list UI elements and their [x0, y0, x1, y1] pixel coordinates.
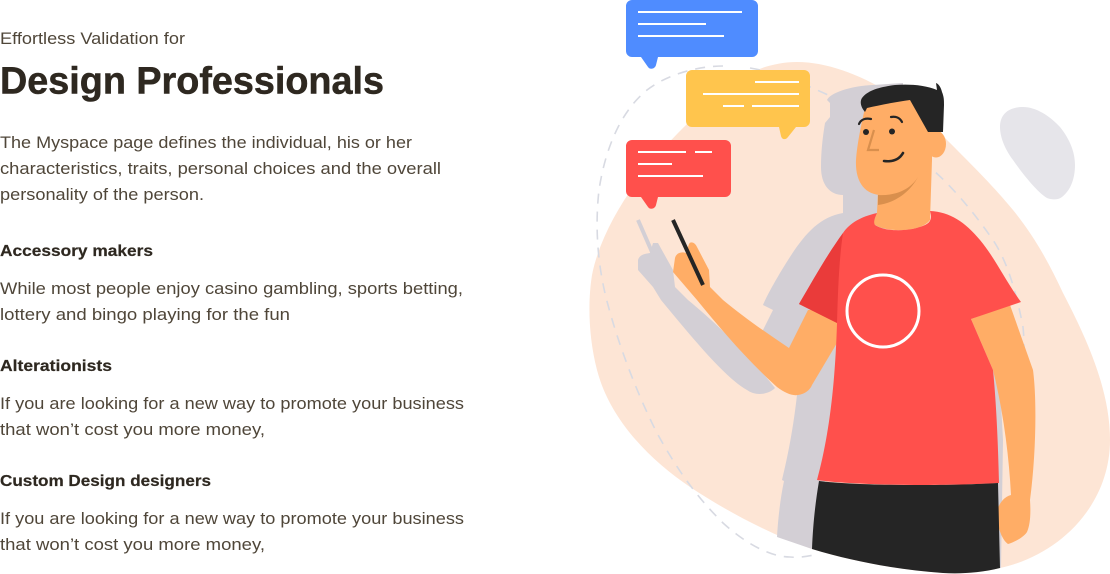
title: Design Professionals — [0, 60, 384, 102]
heading: alterationists: Alterationists — [0, 358, 112, 375]
paragraph: custom design designers: that won’t cost you more money, — [0, 536, 265, 554]
paragraph: accessory makers: While most people enjoy casino gambling, sports betting, — [0, 280, 463, 298]
right arm and fist — [971, 305, 1035, 544]
paragraph: custom design designers: If you are looking for a new way to promote your business — [0, 510, 464, 528]
heading: custom design designers: Custom Design designers — [0, 473, 211, 490]
shadow stylus — [638, 220, 652, 252]
intro paragraph: personality of the person. — [0, 186, 204, 204]
illustration — [589, 0, 1110, 573]
face — [856, 95, 932, 195]
yellow chat bubble — [686, 70, 810, 139]
neck — [873, 160, 932, 230]
hair — [861, 83, 944, 132]
paragraph: custom design designers — [0, 510, 464, 554]
paragraph: alterationists: If you are looking for a new way to promote your business — [0, 395, 464, 413]
shirt sleeve shade — [799, 233, 843, 323]
text column — [0, 30, 464, 554]
intro paragraph: characteristics, traits, personal choices and the overall — [0, 160, 441, 178]
brows and smile — [859, 117, 903, 161]
blue chat bubble — [626, 0, 758, 69]
ear — [926, 130, 946, 158]
eyebrow: Effortless Validation for — [0, 30, 186, 48]
red chat bubble — [626, 140, 731, 209]
paragraph: accessory makers — [0, 280, 463, 324]
intro paragraph: The Myspace page defines the individual, his or her — [0, 134, 413, 152]
heading: accessory makers: Accessory makers — [0, 243, 153, 260]
left arm and hand — [673, 242, 840, 395]
shirt — [799, 211, 1021, 485]
dashed orbit — [597, 66, 1024, 557]
intro paragraph — [0, 134, 441, 204]
nose — [868, 130, 879, 150]
paragraph: alterationists: that won’t cost you more money, — [0, 421, 265, 439]
paragraph: alterationists — [0, 395, 464, 439]
paragraph: accessory makers: lottery and bingo playing for the fun — [0, 306, 290, 324]
neck shadow — [878, 177, 918, 205]
shorts — [812, 481, 1000, 573]
stylus — [673, 220, 703, 285]
shadow of person — [638, 83, 1003, 568]
background blob — [589, 62, 1110, 573]
eyes — [863, 128, 895, 135]
grey blob — [1000, 107, 1075, 199]
person — [673, 83, 1035, 573]
shirt circle emblem — [847, 275, 919, 347]
